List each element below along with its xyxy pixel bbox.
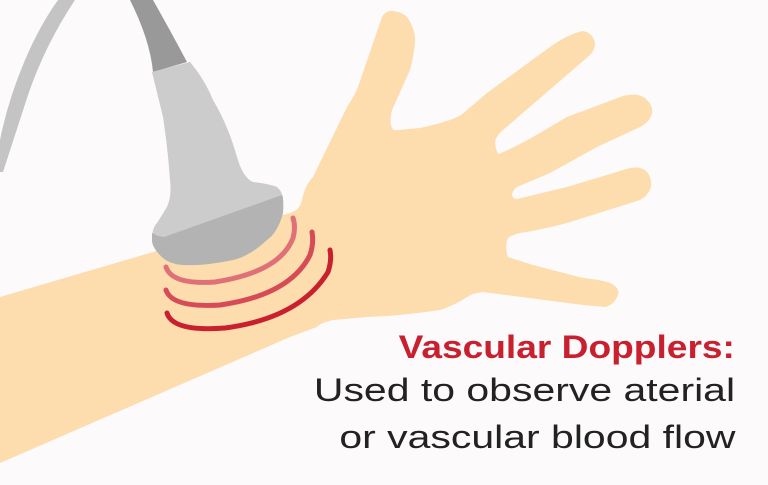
description line 2: or vascular blood flow <box>339 419 735 455</box>
doppler waves <box>166 218 331 329</box>
probe <box>130 0 283 265</box>
cable <box>0 0 75 172</box>
title: Vascular Dopplers: <box>399 329 735 365</box>
description line 1: Used to observe aterial <box>314 372 735 408</box>
arm and hand <box>0 11 652 463</box>
